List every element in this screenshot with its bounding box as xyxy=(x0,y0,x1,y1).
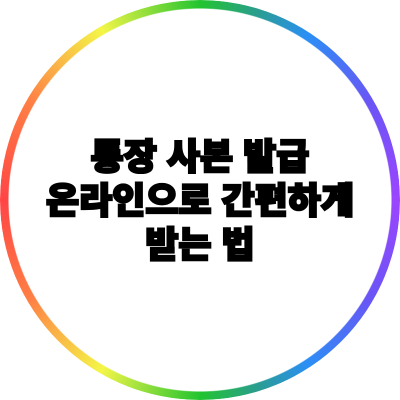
title: 온라인으로 간편하게 xyxy=(46,180,354,220)
title xyxy=(46,136,354,264)
title: 받는 법 xyxy=(145,224,255,264)
title: 통장 사본 발급 xyxy=(91,136,309,176)
